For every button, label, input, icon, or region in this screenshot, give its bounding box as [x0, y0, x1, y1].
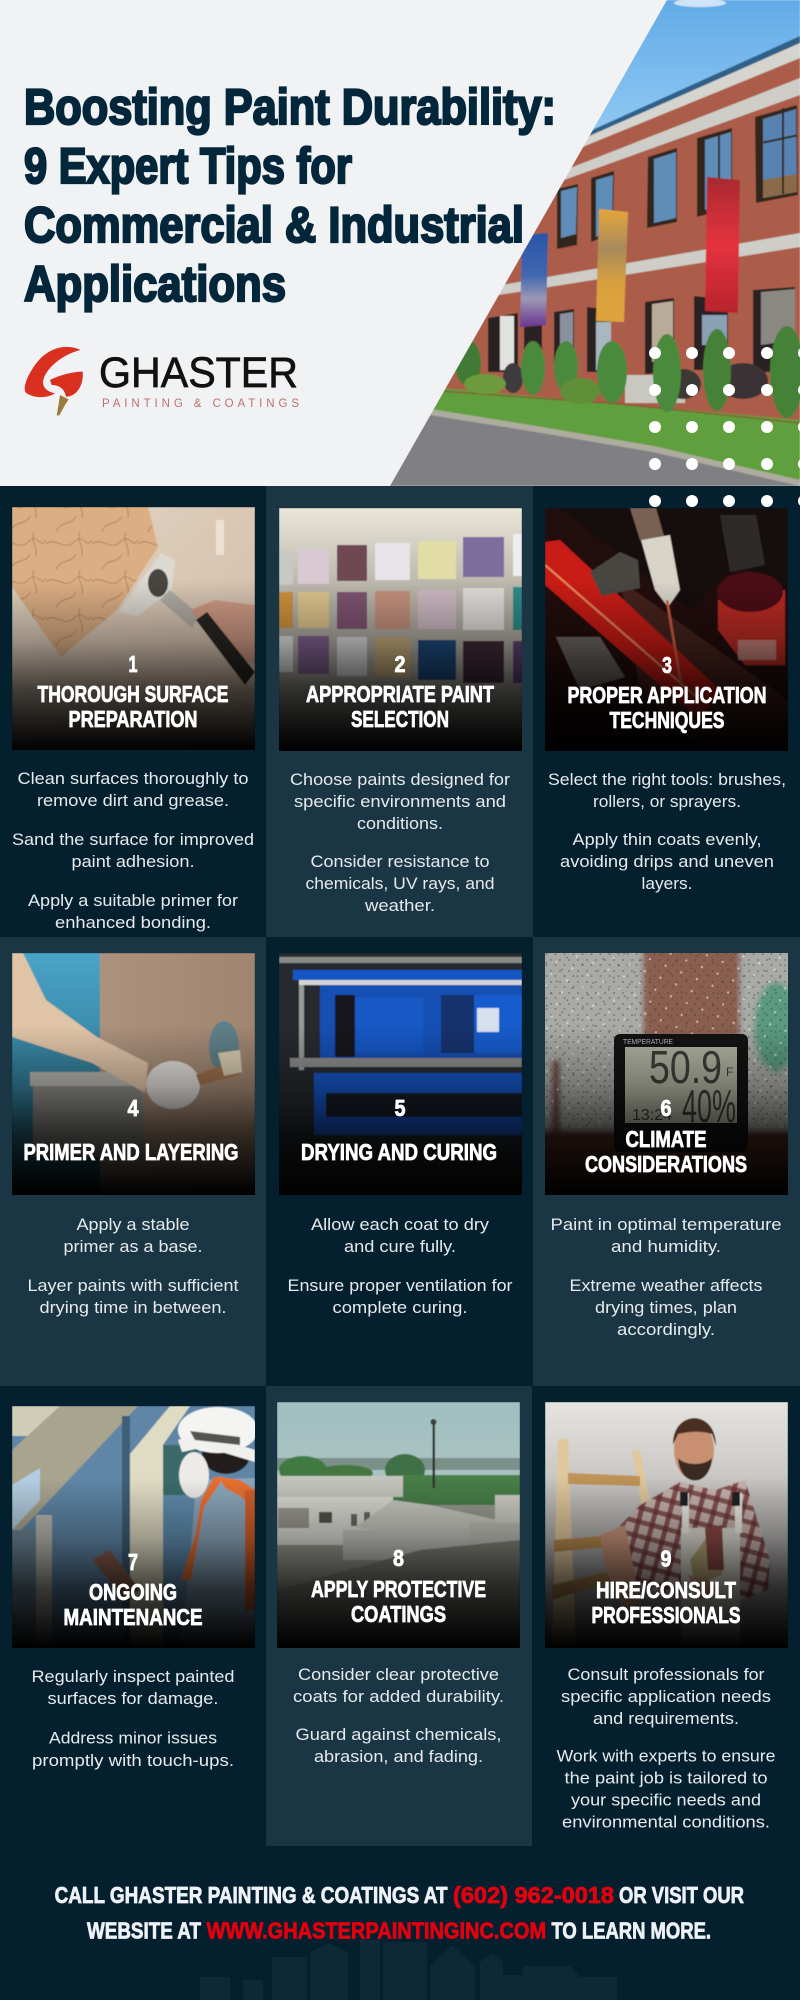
- photo: thermometer behind wet glass: 50.9: [649, 1041, 722, 1093]
- heading: hire/consult professionals: HIRE/CONSULT: [596, 1577, 736, 1603]
- step number 5: 5: [394, 1095, 406, 1121]
- heading: climate considerations: CONSIDERATIONS: [585, 1151, 747, 1177]
- header panel: [0, 0, 800, 486]
- heading: ongoing maintenance: ONGOING: [89, 1579, 177, 1605]
- heading: thorough surface preparation: [38, 681, 228, 732]
- text: step 9 tips: and requirements.: [593, 1709, 739, 1728]
- lower windows: [488, 313, 518, 372]
- step number 9: 9: [660, 1546, 672, 1572]
- photo: thermometer behind wet glass: TEMPERATURE: [623, 1037, 673, 1046]
- text: step 8 tips: Consider clear protective: [298, 1665, 499, 1684]
- photo: smiling painter with ladder: [545, 1402, 788, 1648]
- heading: proper application techniques: [568, 682, 766, 733]
- text: step 5 tips: [288, 1215, 513, 1317]
- step number 2: 2: [394, 651, 406, 677]
- text: step 2 tips: [290, 770, 510, 915]
- heading: appropriate paint selection: [306, 681, 494, 732]
- text: step 5 tips: complete curing.: [332, 1298, 468, 1317]
- text: step 9 tips: the paint job is tailored to: [564, 1768, 768, 1788]
- text: step 1 tips: enhanced bonding.: [55, 913, 211, 932]
- heading: proper application techniques: TECHNIQUES: [610, 707, 724, 733]
- heading: apply protective coatings: [311, 1576, 486, 1627]
- heading: thorough surface preparation: THOROUGH SURFACE: [38, 681, 228, 707]
- text: step 2 tips: weather.: [364, 896, 435, 915]
- title: 9 Expert Tips for: [24, 138, 352, 194]
- photo: rooftops and trees: [277, 1402, 520, 1648]
- title: Commercial & Industrial: [24, 197, 524, 253]
- icon: red swoosh G with paint brush: [25, 347, 83, 415]
- text: step 4 tips: primer as a base.: [64, 1237, 202, 1256]
- text: step 7 tips: Regularly inspect painted: [32, 1667, 234, 1686]
- text: step 7 tips: promptly with touch-ups.: [32, 1751, 234, 1770]
- logo: Ghaster Painting & Coatings: [25, 347, 299, 415]
- text: step 9 tips: Work with experts to ensure: [556, 1746, 776, 1766]
- text: step 8 tips: Guard against chemicals,: [296, 1725, 502, 1744]
- heading: ongoing maintenance: MAINTENANCE: [64, 1604, 202, 1630]
- text: step 5 tips: Ensure proper ventilation for: [288, 1276, 513, 1295]
- heading: appropriate paint selection: APPROPRIATE PAINT: [306, 681, 494, 707]
- text: step 5 tips: Allow each coat to dry: [311, 1215, 490, 1234]
- text: step 6 tips: drying times, plan: [595, 1298, 737, 1317]
- logo wordmark: GHASTER: [99, 349, 298, 397]
- text: step 4 tips: [28, 1215, 239, 1317]
- title: Boosting Paint Durability:: [24, 79, 556, 135]
- text: step 2 tips: specific environments and: [294, 792, 506, 811]
- header photo: brick commercial building: [380, 0, 800, 486]
- text: step 9 tips: [556, 1665, 776, 1832]
- photo: thermometer behind wet glass: 40%: [682, 1080, 736, 1132]
- call to action: CALL GHASTER PAINTING & COATINGS AT: [55, 1882, 448, 1908]
- text: step 8 tips: [293, 1665, 504, 1766]
- photo: thermometer behind wet glass: F: [726, 1065, 733, 1079]
- text: step 9 tips: environmental conditions.: [562, 1812, 770, 1832]
- step number 1: 1: [128, 651, 138, 677]
- lawn, curb and road: [390, 414, 800, 486]
- text: step 8 tips: abrasion, and fading.: [314, 1747, 483, 1766]
- text: step 1 tips: Sand the surface for improved: [12, 830, 254, 849]
- text: step 3 tips: layers.: [642, 874, 692, 893]
- call to action: [55, 1882, 744, 1944]
- text: step 7 tips: surfaces for damage.: [48, 1689, 218, 1708]
- text: step 1 tips: Clean surfaces thoroughly to: [18, 769, 248, 788]
- heading: drying and curing: DRYING AND CURING: [301, 1139, 497, 1165]
- photo: thermometer behind wet glass: [545, 953, 788, 1195]
- step number 8: 8: [393, 1545, 404, 1571]
- faint city skyline: [200, 1940, 617, 2000]
- heading: apply protective coatings: COATINGS: [351, 1601, 446, 1627]
- heading: climate considerations: [585, 1126, 747, 1177]
- text: step 4 tips: drying time in between.: [40, 1298, 226, 1317]
- heading: apply protective coatings: APPLY PROTECTIVE: [311, 1576, 486, 1602]
- photo: painting a red beam: [545, 508, 788, 751]
- panel: step 2 paint selection: [279, 508, 522, 915]
- photo: inspector in hard hat: [12, 1406, 258, 1648]
- title: Applications: [24, 256, 286, 312]
- text: step 1 tips: Apply a suitable primer for: [28, 891, 238, 910]
- panel: step 9 hire professionals: [545, 1402, 788, 1832]
- panel: step 8 protective coatings: [277, 1402, 520, 1766]
- text: step 2 tips: conditions.: [357, 814, 443, 833]
- text: step 3 tips: rollers, or sprayers.: [593, 792, 741, 811]
- heading: hire/consult professionals: PROFESSIONALS: [592, 1602, 740, 1628]
- text: step 3 tips: [548, 770, 786, 893]
- panel: step 3 application techniques: [545, 508, 788, 893]
- text: step 2 tips: chemicals, UV rays, and: [306, 874, 494, 893]
- text: step 9 tips: Consult professionals for: [568, 1665, 765, 1684]
- dot pattern: [649, 347, 800, 507]
- banners: [520, 233, 548, 327]
- photo: thermometer behind wet glass: 13:24: [632, 1107, 672, 1124]
- website address: WWW.GHASTERPAINTINGINC.COM: [207, 1918, 546, 1944]
- call to action: OR VISIT OUR: [619, 1882, 744, 1908]
- heading: primer and layering: PRIMER AND LAYERING: [24, 1139, 238, 1165]
- step number 4: 4: [128, 1095, 139, 1121]
- panel: step 6 climate considerations: [545, 953, 788, 1338]
- text: step 3 tips: Select the right tools: brushes,: [548, 770, 786, 789]
- text: step 7 tips: [32, 1667, 234, 1770]
- call to action: TO LEARN MORE.: [552, 1918, 711, 1944]
- text: step 6 tips: Paint in optimal temperature: [550, 1215, 782, 1234]
- text: step 6 tips: [550, 1215, 782, 1339]
- panel: tile backgrounds: [0, 486, 800, 1846]
- shrubs: [625, 375, 685, 403]
- call to action: WEBSITE AT: [87, 1918, 202, 1944]
- text: step 1 tips: [12, 769, 254, 932]
- photo: blue painted frames in drying rack: [279, 953, 522, 1195]
- step number 7: 7: [128, 1549, 138, 1575]
- heading: appropriate paint selection: SELECTION: [351, 706, 449, 732]
- heading: thorough surface preparation: PREPARATION: [68, 706, 198, 732]
- text: step 6 tips: and humidity.: [611, 1237, 721, 1256]
- text: step 3 tips: avoiding drips and uneven: [560, 852, 774, 871]
- text: step 4 tips: Apply a stable: [76, 1215, 190, 1234]
- text: step 6 tips: Extreme weather affects: [570, 1276, 762, 1295]
- text: step 1 tips: remove dirt and grease.: [37, 791, 229, 810]
- panel: step 5 drying and curing: [279, 953, 522, 1317]
- text: step 1 tips: paint adhesion.: [72, 852, 194, 871]
- text: step 9 tips: your specific needs and: [571, 1790, 761, 1810]
- photo: paint swatch wall: [279, 508, 522, 751]
- text: step 2 tips: Choose paints designed for: [290, 770, 510, 789]
- step number 6: 6: [660, 1095, 672, 1121]
- text: step 8 tips: coats for added durability.: [293, 1687, 504, 1706]
- text: step 5 tips: and cure fully.: [344, 1237, 456, 1256]
- heading: climate considerations: CLIMATE: [626, 1126, 706, 1152]
- text: step 7 tips: Address minor issues: [49, 1728, 217, 1748]
- logo tagline: PAINTING & COATINGS: [102, 398, 299, 410]
- panel: step 7 ongoing maintenance: [12, 1406, 258, 1770]
- text: step 2 tips: Consider resistance to: [310, 852, 490, 871]
- text: step 9 tips: specific application needs: [561, 1687, 771, 1706]
- phone number: (602) 962-0018: [453, 1882, 614, 1908]
- text: step 4 tips: Layer paints with sufficient: [28, 1276, 239, 1295]
- panel: step 4 primer and layering: [12, 953, 255, 1317]
- upper windows: [557, 184, 578, 249]
- heading: ongoing maintenance: [64, 1579, 202, 1630]
- step number 3: 3: [662, 652, 672, 678]
- heading: hire/consult professionals: [592, 1577, 740, 1628]
- text: step 6 tips: accordingly.: [617, 1320, 715, 1339]
- panel: step 1 surface preparation: [12, 507, 255, 932]
- title: [24, 79, 556, 312]
- photo: scraping a wall: [12, 507, 255, 750]
- text: step 3 tips: Apply thin coats evenly,: [572, 830, 762, 849]
- photo: gloved hand painting: [12, 953, 255, 1195]
